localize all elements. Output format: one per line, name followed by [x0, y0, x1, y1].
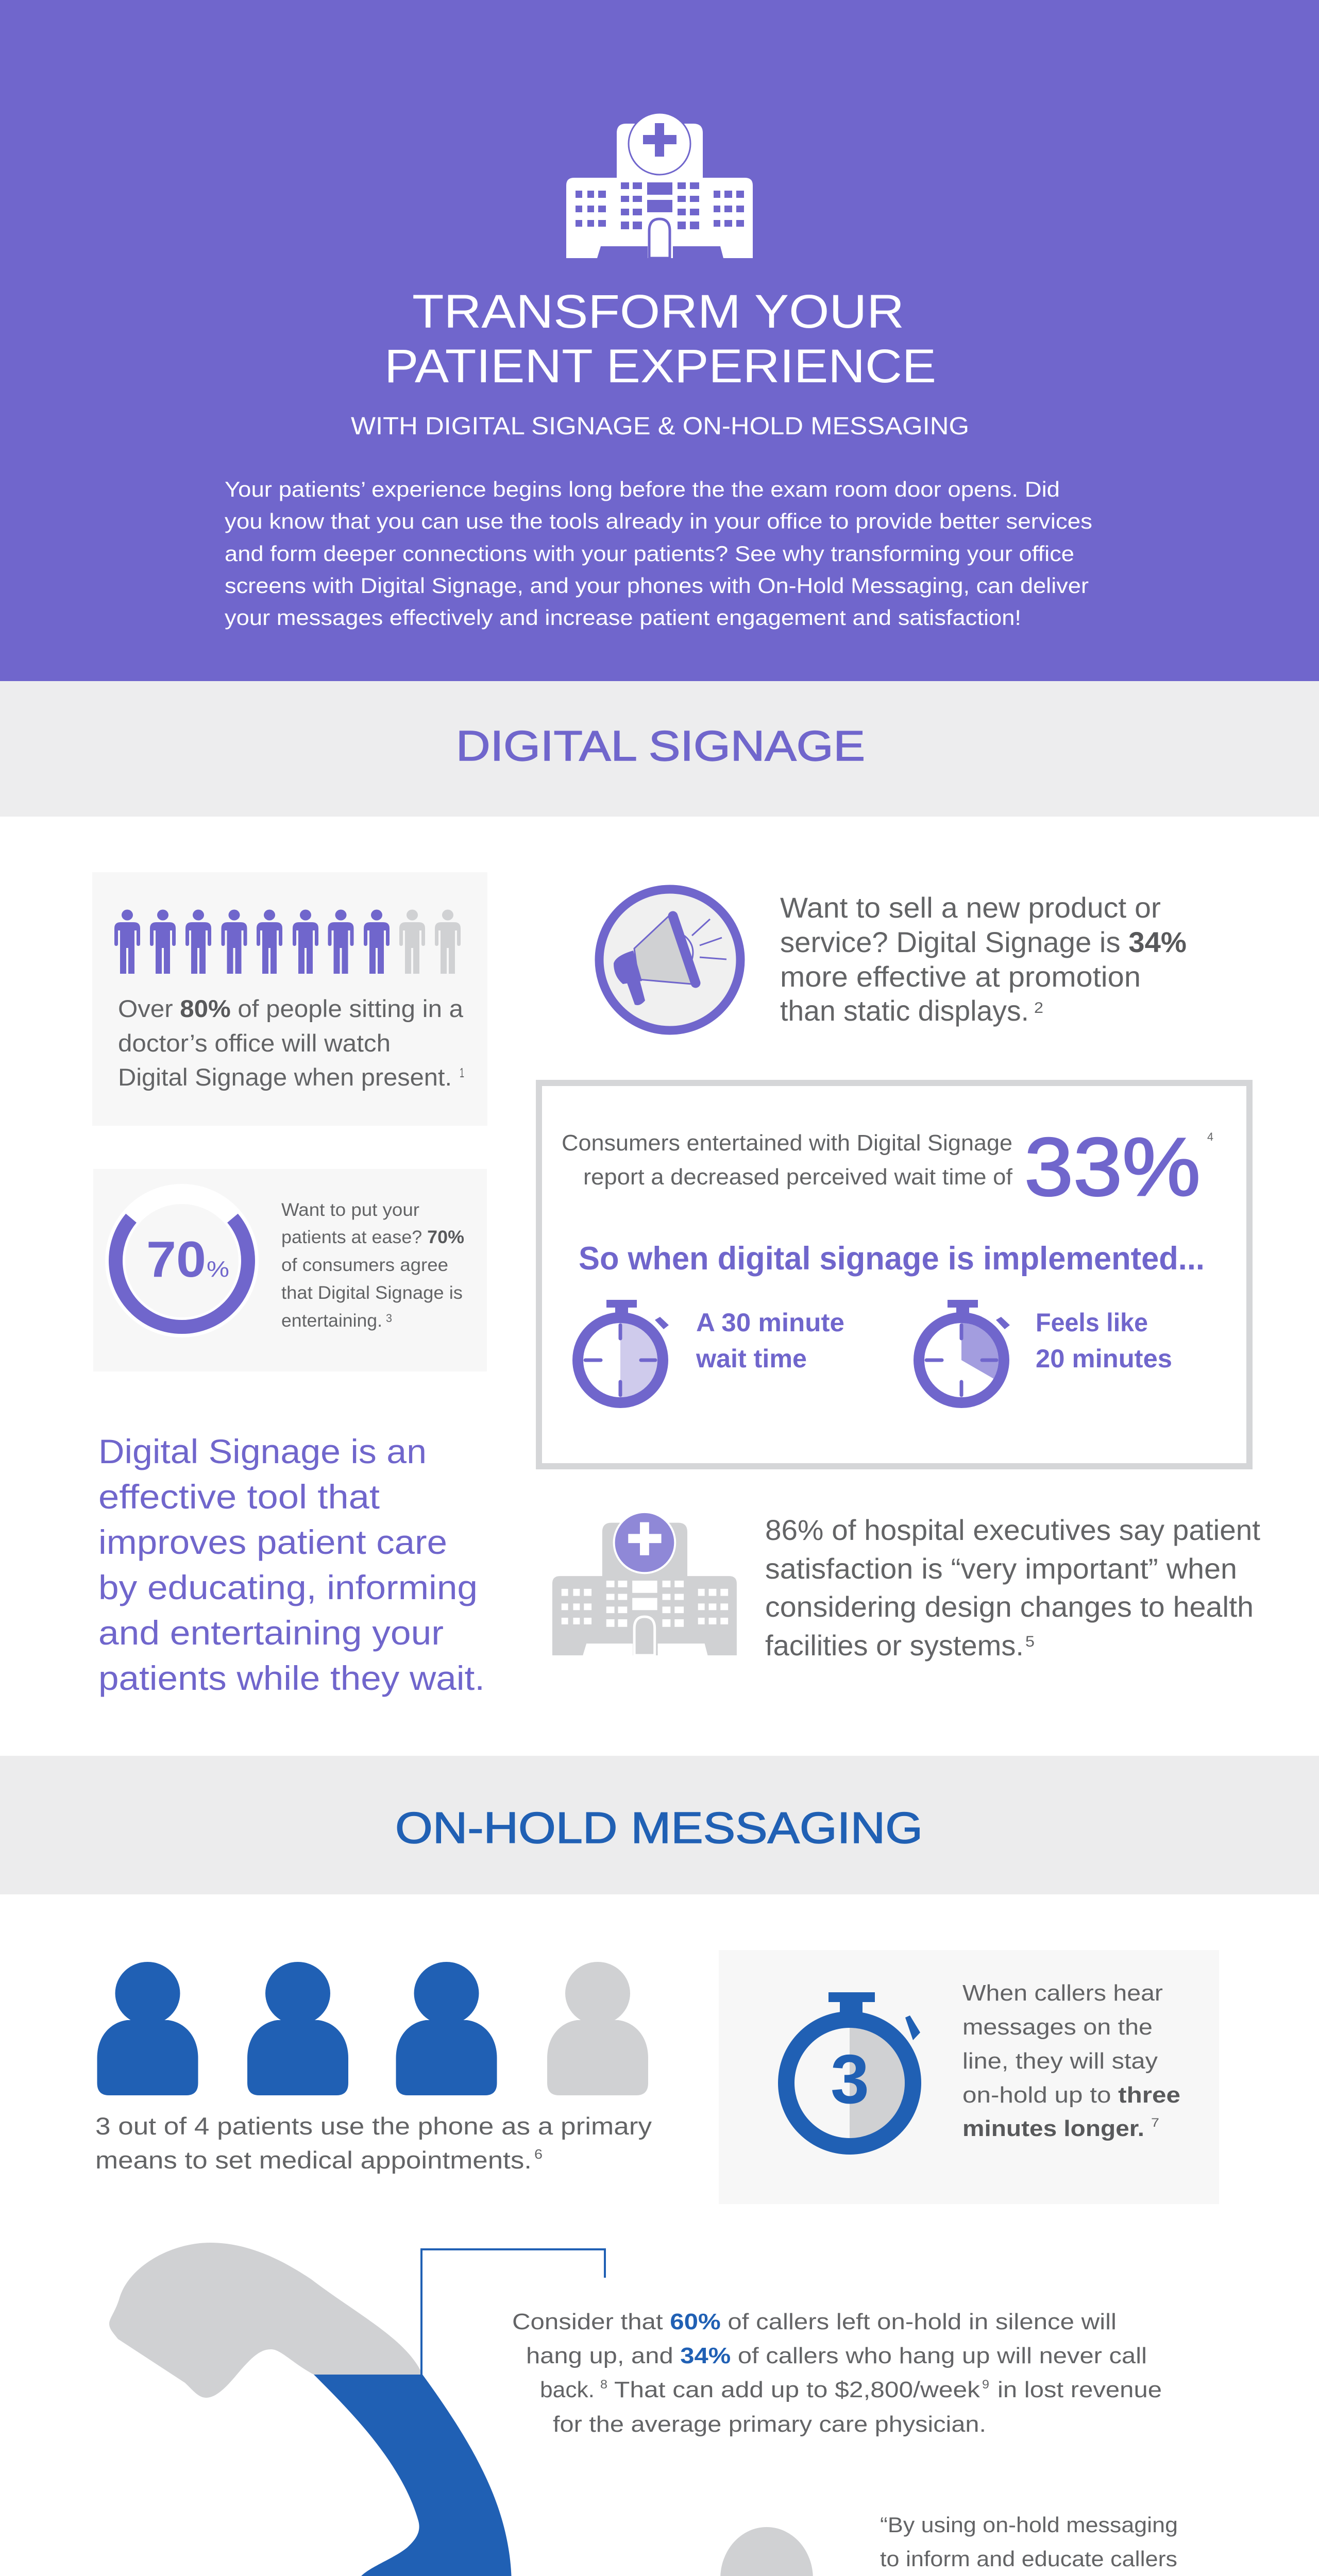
text block: on-hold up to three [962, 2082, 1180, 2108]
text: 60 percent left on hold: That can add up to $2,800/week [614, 2377, 980, 2402]
text block: of consumers agree [281, 1255, 448, 1275]
text: quote [880, 2513, 1178, 2576]
text: quote: to inform and educate callers [880, 2547, 1177, 2571]
text: 34 percent promotion: service? Digital Signage is 34% [780, 926, 1187, 958]
text: 34 percent promotion: more effective at promotion [780, 960, 1141, 993]
text block [562, 1130, 1013, 1190]
text block: that Digital Signage is [281, 1283, 463, 1303]
panel: three minutes longer [719, 1950, 1219, 2204]
text: 3 out of 4 patients [95, 2112, 652, 2174]
text: feels like 20 minutes: Feels like [1036, 1308, 1148, 1337]
text block [281, 1200, 464, 1331]
text block: When callers hear [962, 1980, 1163, 2006]
text: 34 percent promotion: than static displays. [780, 994, 1029, 1027]
text: 60 percent left on hold [512, 2309, 1162, 2437]
text block: Over 80% of people sitting in a [118, 995, 464, 1022]
heading band: digital signage: DIGITAL SIGNAGE [456, 722, 865, 770]
text block: messages on the [962, 2014, 1153, 2040]
text block: Digital Signage when present. [118, 1063, 452, 1091]
panel: 70 percent entertaining [93, 1169, 487, 1371]
callout: digital signage summary: improves patient care [98, 1523, 447, 1561]
icon: doctor with stethoscope [690, 2527, 847, 2576]
icon: megaphone [599, 889, 740, 1030]
icon: hospital gray [552, 1512, 737, 1655]
text: 60 percent left on hold: in lost revenue [997, 2377, 1162, 2402]
text: 34 percent promotion: 2 [1034, 999, 1043, 1016]
text block [962, 1980, 1180, 2141]
text: 60 percent left on hold: hang up, and 34% of callers who hang up will never call [526, 2343, 1147, 2368]
text: 3 out of 4 patients: 6 [534, 2146, 543, 2162]
callout: digital signage summary [98, 1432, 485, 1697]
text block: 1 [460, 1065, 464, 1080]
icon: four patients [97, 1962, 648, 2095]
heading band: digital signage [0, 681, 1319, 817]
stat: 33 percent: 4 [1207, 1130, 1213, 1143]
text block: patients at ease? 70% [281, 1227, 464, 1247]
callout: digital signage summary: and entertaining your [98, 1614, 444, 1652]
text block: report a decreased perceived wait time of [583, 1164, 1013, 1190]
panel: perceived wait time [539, 1083, 1249, 1466]
text: 86 percent executives: considering design changes to health [765, 1590, 1254, 1623]
text block: Consumers entertained with Digital Signage [562, 1130, 1012, 1156]
callout: digital signage summary: by educating, informing [98, 1568, 478, 1606]
icon: telephone handset [109, 2243, 512, 2576]
intro text: and form deeper connections with your patients? See why transforming your office [225, 541, 1074, 566]
text: a 30 minute wait time [696, 1308, 844, 1373]
text: 60 percent left on hold: Consider that 60% of callers left on-hold in silence will [512, 2309, 1117, 2334]
header panel [0, 0, 1319, 681]
text: 34 percent promotion [780, 891, 1187, 1027]
text block: doctor’s office will watch [118, 1029, 391, 1057]
donut chart 70%: 70 [146, 1231, 206, 1287]
text: a 30 minute wait time: wait time [696, 1344, 807, 1373]
text: feels like 20 minutes [1036, 1308, 1172, 1373]
heading band: on-hold messaging: ON-HOLD MESSAGING [395, 1804, 923, 1853]
icon: stopwatch 3 [786, 1992, 920, 2146]
text block: line, they will stay [962, 2048, 1158, 2074]
text: 3 out of 4 patients: 3 out of 4 patients use the phone as a primary [95, 2112, 652, 2140]
subtitle: WITH DIGITAL SIGNAGE & ON-HOLD MESSAGING [351, 413, 969, 440]
text block: 7 [1151, 2116, 1159, 2130]
stat: 33 percent: 33% [1024, 1121, 1200, 1213]
title: TRANSFORM YOUR [412, 285, 904, 338]
text: quote: “By using on-hold messaging [880, 2513, 1178, 2537]
callout: digital signage summary: effective tool that [98, 1478, 380, 1516]
intro text [225, 477, 1092, 630]
icon: hospital [566, 113, 753, 258]
text: 60 percent left on hold: 8 [600, 2378, 607, 2392]
text: 34 percent promotion: Want to sell a new product or [780, 891, 1161, 924]
icon: ten people row [114, 910, 461, 974]
text: 86 percent executives [765, 1514, 1260, 1662]
text: 86 percent executives: 86% of hospital executives say patient [765, 1514, 1260, 1546]
icon: stopwatch 30 minutes [578, 1300, 669, 1402]
callout: digital signage summary: patients while they wait. [98, 1659, 485, 1697]
text: 60 percent left on hold: for the average primary care physician. [553, 2412, 986, 2437]
panel: 80 percent watch [92, 872, 487, 1126]
text block: Want to put your [281, 1200, 419, 1220]
intro text: screens with Digital Signage, and your phones with On-Hold Messaging, can deliver [225, 573, 1089, 598]
callout: digital signage summary: Digital Signage is an [98, 1432, 427, 1470]
text block [118, 995, 464, 1091]
intro text: you know that you can use the tools already in your office to provide better services [225, 509, 1092, 533]
subheading: So when digital signage is implemented... [579, 1241, 1205, 1277]
intro text: your messages effectively and increase patient engagement and satisfaction! [225, 605, 1021, 630]
text: 60 percent left on hold: 9 [982, 2378, 989, 2392]
heading band: on-hold messaging [0, 1756, 1319, 1894]
text block: 3 [386, 1312, 392, 1325]
connector bracket [421, 2249, 605, 2375]
text: feels like 20 minutes: 20 minutes [1036, 1344, 1172, 1373]
intro text: Your patients’ experience begins long before the the exam room door opens. Did [225, 477, 1060, 501]
text: 86 percent executives: facilities or systems. [765, 1629, 1024, 1662]
text: 60 percent left on hold: back. [540, 2377, 595, 2402]
text: a 30 minute wait time: A 30 minute [696, 1308, 844, 1337]
donut chart 70%: % [207, 1257, 229, 1282]
title: PATIENT EXPERIENCE [384, 340, 936, 393]
icon: stopwatch 3: 3 [831, 2040, 869, 2118]
title [384, 285, 936, 393]
text: 3 out of 4 patients: means to set medical appointments. [95, 2146, 532, 2174]
text: 86 percent executives: satisfaction is “very important” when [765, 1552, 1237, 1585]
icon: stopwatch 20 minutes [919, 1300, 1010, 1402]
text block: entertaining. [281, 1311, 382, 1331]
text block: minutes longer. [962, 2116, 1144, 2141]
text: 86 percent executives: 5 [1025, 1633, 1035, 1650]
donut chart 70% [115, 1194, 248, 1327]
